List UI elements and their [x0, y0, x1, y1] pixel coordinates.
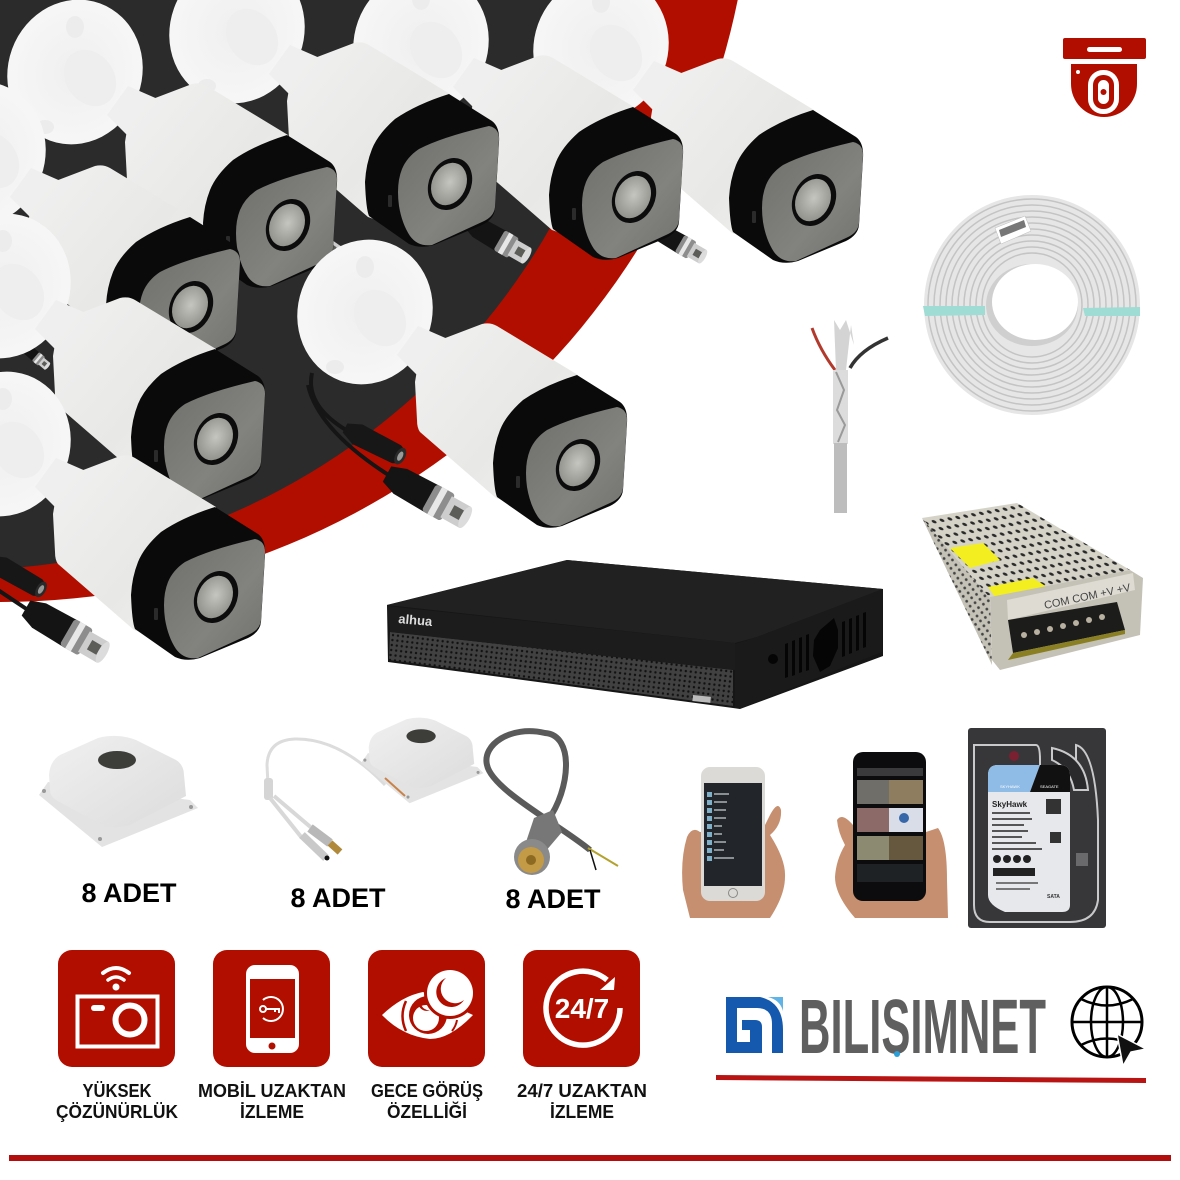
label: ÖZELLİĞİ: [387, 1101, 467, 1122]
icon: eye with moon: [382, 967, 476, 1039]
BNC cable: [486, 731, 618, 875]
feature: night vision: [368, 950, 485, 1122]
icon: globe with cursor: [1072, 987, 1146, 1066]
feature: high resolution: [56, 950, 178, 1122]
phone in hand: app menu: [682, 767, 785, 918]
label: [517, 1081, 647, 1122]
icon: wifi camera: [78, 968, 158, 1046]
camera 4: [0, 0, 337, 288]
pigtail connectors: lower left camera: [0, 551, 114, 668]
label: [56, 1081, 178, 1122]
icon: dome camera: [1063, 38, 1146, 117]
camera 8: [277, 220, 627, 528]
label: İZLEME: [550, 1102, 614, 1122]
group of eight bullet cameras: [0, 0, 863, 660]
power supply unit: [922, 503, 1143, 670]
quantity label: power video cable: 8 ADET: [290, 883, 386, 913]
cable coil: [923, 195, 1140, 415]
phone in hand: camera views: [835, 752, 948, 918]
camera 2: [333, 0, 683, 260]
icon: phone with key: [246, 965, 299, 1053]
hard disk drive: SATA: [1047, 894, 1060, 900]
label: ÇÖZÜNÜRLÜK: [56, 1102, 178, 1122]
red footer rule: [9, 1155, 1171, 1161]
hard disk drive: [968, 728, 1106, 928]
junction box with power video cable: [264, 718, 483, 860]
camera 5: [0, 62, 240, 370]
label: GECE GÖRÜŞ: [371, 1081, 483, 1101]
cut cable sample: [812, 320, 888, 513]
icon: 24/7 cycle arrow: 24/7: [555, 993, 609, 1024]
DVR recorder: alhua: [398, 611, 434, 629]
red rule under logo: [716, 1075, 1146, 1083]
hard disk drive: SKYHAWK: [1000, 784, 1020, 789]
hard disk drive: SEAGATE: [1040, 784, 1059, 789]
camera 3: [149, 0, 499, 247]
cable connectors behind cameras: [18, 212, 710, 371]
icon: 24/7 cycle arrow: [546, 971, 620, 1045]
quantity label: junction box: 8 ADET: [81, 878, 177, 908]
label: İZLEME: [240, 1102, 304, 1122]
logo mark: [726, 997, 783, 1053]
DVR recorder: [387, 560, 883, 709]
feature: mobile remote monitoring: [198, 950, 346, 1122]
camera 7: [0, 352, 265, 660]
camera 6: [0, 194, 265, 502]
label: YÜKSEK: [82, 1081, 152, 1101]
brand logo: Bilisimnet: [726, 975, 1050, 1074]
quantity label: BNC cable: 8 ADET: [505, 884, 601, 914]
label: MOBİL UZAKTAN: [198, 1081, 346, 1101]
camera 1: [513, 0, 863, 263]
junction box: [39, 736, 198, 847]
label: [371, 1081, 483, 1122]
background disc: red ring and dark circle: [0, 0, 753, 602]
pigtail connectors: centre camera: [308, 373, 476, 533]
power supply unit: COM COM +V +V: [1043, 582, 1132, 612]
feature: 24/7 remote monitoring: [517, 950, 647, 1122]
hard disk drive: SkyHawk: [992, 800, 1028, 809]
label: 24/7 UZAKTAN: [517, 1081, 647, 1101]
label: [198, 1081, 346, 1122]
